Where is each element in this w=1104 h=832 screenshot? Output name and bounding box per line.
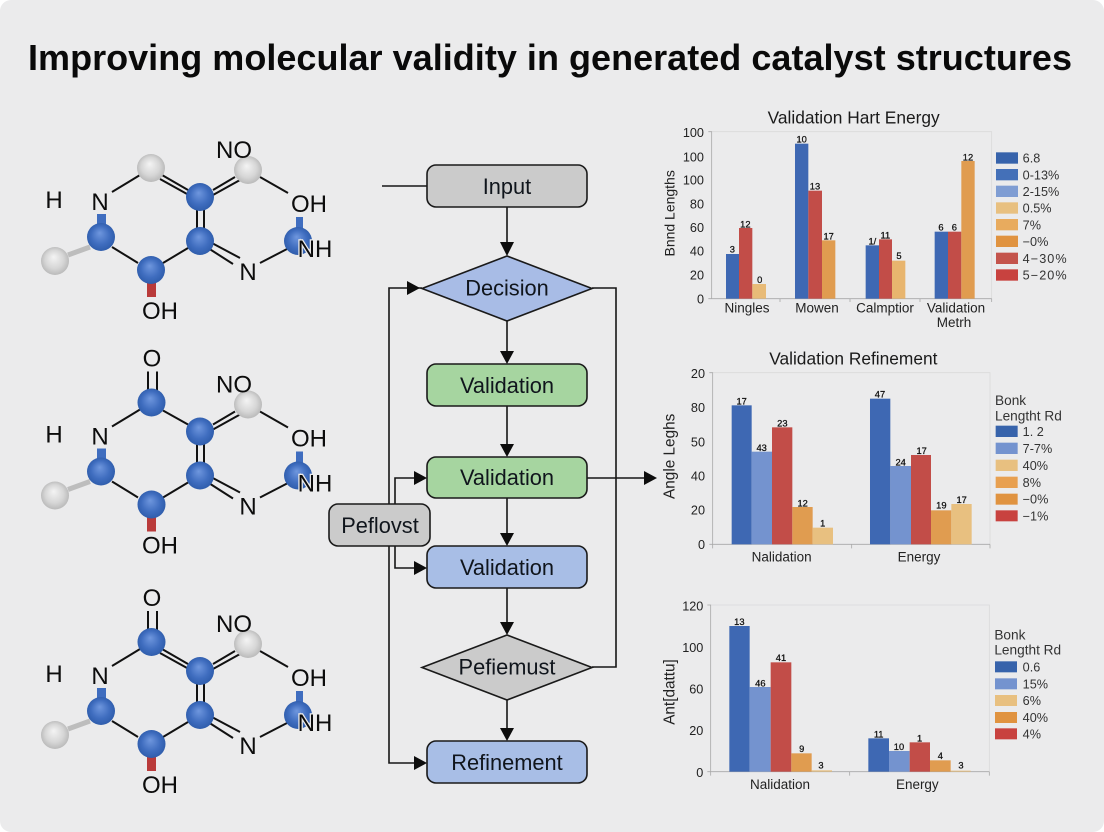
chart 2 legend: 40% [1023, 459, 1048, 473]
molecule 2: OH [291, 426, 327, 452]
chart 1 category labels: Ningles [725, 301, 770, 316]
node: validation blue [427, 546, 587, 588]
molecule 1: N [239, 259, 257, 286]
node: decision: Decision [465, 276, 549, 300]
chart 1 value labels: 6 [938, 223, 944, 233]
chart 1 value labels: 11 [880, 230, 890, 240]
chart 3 value labels: 3 [818, 760, 824, 770]
node: validation green 1: Validation [460, 373, 554, 398]
molecule 2: NH [298, 470, 332, 498]
chart 2 value labels: 17 [916, 446, 927, 456]
molecule 2: O [143, 346, 161, 372]
chart 1: validation hart energy [662, 108, 1067, 330]
chart 1 value labels: 5 [896, 251, 902, 261]
molecule 3: NO [216, 611, 252, 638]
node: refinement [427, 741, 587, 783]
chart 1 category labels: Validation [927, 301, 985, 316]
molecule 2: H [45, 422, 63, 448]
chart 1 value labels [730, 135, 973, 285]
chart 1 value labels: 0 [757, 275, 762, 285]
chart 1 axes: 100 [683, 126, 704, 140]
chart 2 category labels: Energy [898, 550, 941, 565]
chart 3 category labels: Nalidation [750, 777, 810, 792]
chart 3 axes: 20 [689, 724, 703, 738]
node: refinement: Refinement [451, 750, 563, 775]
chart 3 legend [994, 627, 1061, 741]
chart 1 value labels: 17 [823, 231, 834, 241]
chart 2 value labels: 19 [936, 500, 947, 510]
chart 2 value labels: 12 [797, 498, 808, 508]
node: peflovst: Peflovst [341, 513, 419, 538]
chart 3 axes [662, 600, 989, 780]
chart 2 legend: 8% [1023, 476, 1041, 490]
chart 3 bars [729, 626, 971, 772]
chart 2 legend: Bonk [995, 393, 1026, 408]
chart 1 legend: 6.8 [1023, 152, 1040, 166]
chart 2 legend: −0% [1023, 493, 1048, 507]
flowchart [329, 165, 657, 783]
chart 1 value labels: 12 [740, 219, 751, 229]
chart 1 legend: 0-13% [1023, 168, 1059, 182]
chart 3 value labels: 46 [755, 679, 766, 689]
chart 3 legend: 0.6 [1023, 660, 1040, 674]
chart 1 value labels: 3 [730, 245, 735, 255]
chart 2 category labels: Nalidation [752, 550, 812, 565]
chart 3 value labels: 1 [917, 733, 922, 743]
chart 3 value labels: 10 [894, 742, 904, 752]
chart 1 value labels: 6 [952, 223, 957, 233]
chart 2 value labels: 23 [777, 418, 788, 428]
molecule 3: O [143, 585, 161, 612]
node: peflovst [329, 504, 430, 546]
chart 1 axes: 20 [690, 268, 704, 282]
chart 3 axes: 120 [682, 600, 703, 614]
chart 1 category labels: Calmptior [856, 301, 914, 316]
molecule 3: N [91, 663, 109, 690]
node: validation blue: Validation [460, 555, 554, 580]
chart 3 legend: 15% [1023, 677, 1048, 691]
chart 2 value labels: 47 [875, 390, 885, 400]
molecule 1: N [91, 189, 109, 216]
chart 1 value labels: 1/ [868, 236, 877, 246]
chart 2 value labels: 17 [736, 396, 747, 406]
chart 2 value labels: 43 [756, 443, 767, 453]
molecule 1: NH [298, 236, 332, 263]
chart 1 legend: 7% [1023, 218, 1041, 232]
node: decision [422, 256, 592, 321]
chart 1 axes: Bnnd Lengths [662, 170, 678, 256]
chart 2 axes [662, 367, 990, 552]
chart 1 axes: 0 [697, 292, 704, 306]
chart 3 category labels: Energy [896, 777, 939, 792]
chart 2 bars [732, 399, 972, 544]
chart 2 value labels: 17 [956, 495, 967, 505]
chart 3 value labels: 41 [776, 653, 786, 663]
chart 2: validation refinement [662, 348, 1062, 565]
chart 3: antidattu [662, 600, 1061, 792]
chart 2 legend: 1. 2 [1023, 425, 1044, 439]
node: validation green 2: Validation [460, 465, 554, 490]
molecule 2: OH [142, 532, 178, 560]
chart 1 legend: −0% [1023, 235, 1048, 249]
molecule 3: N [239, 733, 257, 760]
molecule 1: NO [216, 137, 252, 164]
chart 1 legend: 2-15% [1023, 185, 1059, 199]
chart 2 legend: Lengtht Rd [995, 408, 1062, 423]
molecule 1: H [45, 187, 63, 214]
chart 2 legend [995, 393, 1062, 523]
chart 3 legend: Lengtht Rd [994, 643, 1061, 658]
chart 1 title: Validation Hart Energy [768, 108, 940, 128]
chart 1 bars [726, 144, 975, 299]
chart 1 legend: 4−30% [1023, 252, 1067, 266]
chart 3 legend: Bonk [994, 627, 1026, 642]
chart 1 value labels: 13 [810, 182, 820, 192]
molecule 1: OH [142, 298, 178, 325]
chart 1 axes [662, 126, 992, 306]
node: validation green 2 [427, 457, 587, 498]
chart 2 category labels [752, 550, 941, 565]
chart 2 title: Validation Refinement [769, 348, 938, 368]
molecule 1: OH [291, 191, 327, 218]
chart 1 category labels: Metrh [937, 315, 971, 330]
chart 3 value labels: 13 [734, 617, 745, 627]
chart 1 axes: 40 [690, 245, 704, 259]
chart 3 axes: 100 [682, 641, 703, 655]
chart 3 value labels: 11 [874, 729, 884, 739]
node: pefiemust [422, 635, 592, 700]
chart 1 legend: 5−20% [1023, 269, 1067, 283]
chart 3 legend: 4% [1023, 727, 1041, 741]
chart 1 category labels: Mowen [795, 301, 839, 316]
chart 3 value labels: 4 [938, 751, 943, 761]
chart 1 axes: 100 [683, 174, 704, 188]
chart 2 legend: −1% [1023, 509, 1048, 523]
chart 2 axes: 80 [691, 401, 705, 415]
molecule 3: H [45, 661, 63, 688]
chart 3 legend: 6% [1023, 694, 1041, 708]
molecule 3: OH [291, 665, 327, 692]
molecule 3: OH [142, 772, 178, 799]
chart 3 axes: 60 [689, 683, 703, 697]
chart 1 axes: 100 [683, 150, 704, 164]
chart 2 value labels: 24 [895, 457, 906, 467]
chart 2 axes: 50 [691, 435, 705, 449]
flow connectors [382, 186, 644, 763]
chart 2 axes: 40 [691, 469, 705, 483]
chart 2 axes: 20 [691, 367, 705, 381]
title: Improving molecular validity in generated catalyst structures [28, 37, 1072, 78]
chart 1 legend [996, 152, 1067, 283]
molecule 2: N [91, 424, 109, 450]
chart 1 axes: 80 [690, 198, 704, 212]
molecule 2 [41, 346, 332, 560]
chart 1 value labels: 10 [796, 135, 807, 145]
chart 3 value labels [734, 617, 964, 771]
chart 3 value labels: 3 [958, 761, 964, 771]
chart 2 value labels [736, 390, 967, 528]
chart 1 axes: 60 [690, 221, 704, 235]
node: validation green 1 [427, 364, 587, 406]
chart 1 value labels: 12 [963, 152, 973, 162]
chart 2 axes: Angle Leghs [662, 413, 679, 499]
chart 1 legend: 0.5% [1023, 202, 1052, 216]
chart 2 axes: 0 [698, 538, 705, 552]
node: input: Input [483, 174, 531, 199]
chart 2 legend: 7-7% [1023, 442, 1052, 456]
molecule 1 [41, 137, 332, 325]
arrowheads [407, 242, 657, 770]
node: pefiemust: Pefiemust [459, 654, 555, 680]
chart 3 category labels [750, 777, 939, 792]
molecule 3 [41, 585, 332, 799]
molecule 2: N [239, 494, 257, 520]
chart 3 axes: Ant[dattu] [662, 659, 679, 725]
chart 3 value labels: 9 [799, 744, 804, 754]
node: input [427, 165, 587, 207]
chart 3 axes: 0 [696, 766, 703, 780]
molecule 2: NO [216, 372, 252, 398]
chart 2 axes: 20 [691, 504, 705, 518]
chart 3 legend: 40% [1023, 711, 1048, 725]
chart 2 value labels: 1 [820, 518, 825, 528]
chart 1 category labels [725, 301, 985, 330]
molecule 3: NH [298, 710, 332, 737]
